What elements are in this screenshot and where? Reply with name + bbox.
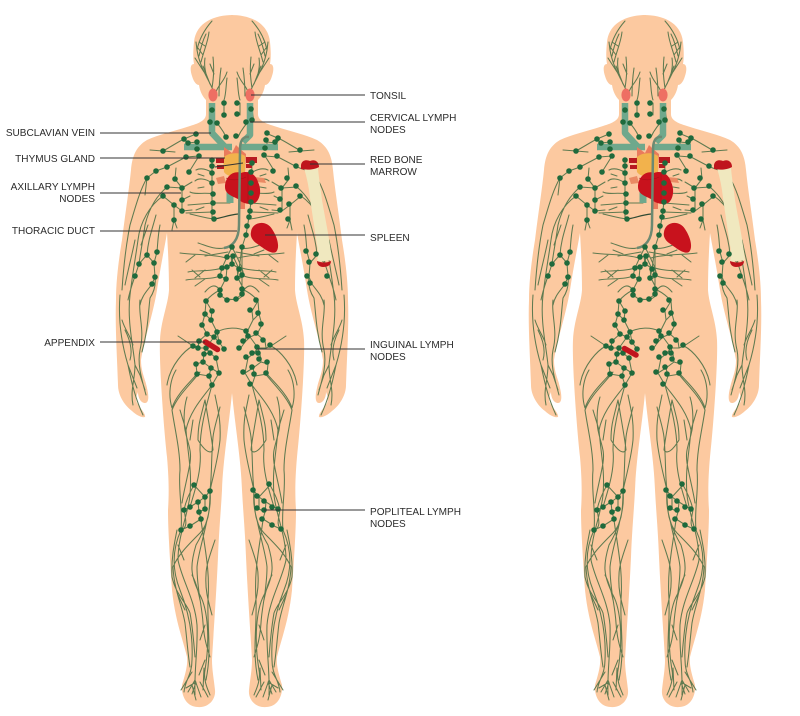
second lymph ducts: [597, 103, 691, 203]
label: axillary lymph nodes: [11, 182, 181, 205]
appendix, front view: [206, 342, 218, 350]
label: cervical lymph nodes: CERVICAL LYMPH: [370, 113, 456, 124]
label: thymus gland: THYMUS GLAND: [15, 154, 95, 165]
label: appendix: APPENDIX: [44, 338, 95, 349]
second bone: [714, 160, 745, 267]
lymph vessels: [119, 21, 345, 700]
label: cervical lymph nodes: NODES: [370, 125, 406, 136]
label: spleen: SPLEEN: [370, 233, 410, 244]
label: subclavian vein: SUBCLAVIAN VEIN: [6, 128, 95, 139]
second body silhouette: [529, 15, 761, 707]
label: thymus gland: [15, 154, 243, 167]
second thymus and heart: [629, 137, 679, 248]
label: cervical lymph nodes: [250, 113, 456, 136]
second appendix: [624, 348, 636, 355]
lymph nodes: [135, 103, 327, 530]
label: inguinal lymph nodes: INGUINAL LYMPH: [370, 340, 454, 351]
label: popliteal lymph nodes: NODES: [370, 519, 406, 530]
body silhouette: [116, 15, 348, 707]
label: red bone marrow: [310, 155, 423, 178]
spleen: [251, 223, 278, 253]
figure: front view with labels: [116, 15, 348, 707]
label: inguinal lymph nodes: [257, 340, 454, 363]
red bone marrow bone: [301, 160, 332, 267]
tonsils: [208, 88, 255, 102]
label: tonsil: TONSIL: [370, 91, 407, 102]
label: axillary lymph nodes: AXILLARY LYMPH: [11, 182, 95, 193]
second lymph nodes: [548, 103, 740, 530]
label: inguinal lymph nodes: NODES: [370, 352, 406, 363]
second lymph vessels: [532, 21, 758, 700]
lymph ducts: [184, 103, 278, 203]
label: red bone marrow: RED BONE: [370, 155, 423, 166]
label: red bone marrow: MARROW: [370, 167, 417, 178]
label: axillary lymph nodes: NODES: [59, 194, 95, 205]
thymus and heart: [216, 137, 266, 248]
label: popliteal lymph nodes: POPLITEAL LYMPH: [370, 507, 461, 518]
label: thoracic duct: THORACIC DUCT: [12, 226, 95, 237]
figure: second body without labels: [529, 15, 761, 707]
label: popliteal lymph nodes: [264, 507, 461, 530]
second spleen: [664, 223, 691, 253]
second tonsils: [621, 88, 668, 102]
